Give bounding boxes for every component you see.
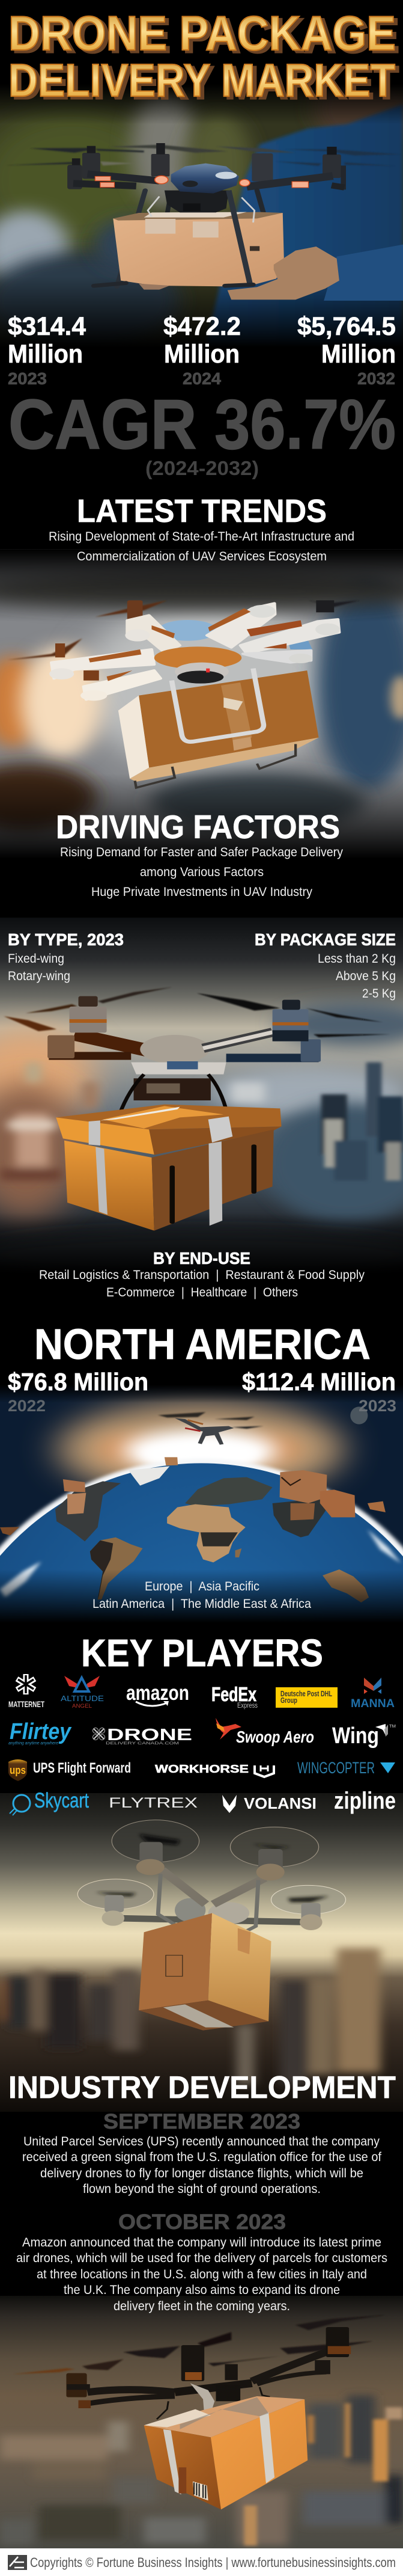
drone motors and arms (67, 143, 346, 189)
october development text: air drones, which will be used for the delivery of parcels for customers (16, 2251, 387, 2265)
blurred city (0, 2395, 403, 2545)
hero image: drone with package and courier (0, 88, 403, 343)
logo: manna (351, 1678, 395, 1710)
logo: volansi: VOLANSI (244, 1794, 317, 1812)
market size stat 2023: 2023 (8, 369, 47, 388)
footer logo (8, 2555, 27, 2570)
by package size segment: 2-5 Kg (362, 987, 396, 1001)
hanging package (139, 1913, 271, 2031)
logo: altitude angel (61, 1676, 104, 1709)
drone arms and motors (66, 2327, 351, 2419)
continent: asia (273, 1497, 334, 1538)
market size stat 2024: Million (164, 340, 240, 369)
logo: wing: TM (389, 1725, 396, 1729)
courier hand and sleeve (139, 245, 403, 301)
continent: madagascar (235, 1548, 241, 1557)
continent: australia (323, 1569, 369, 1602)
globe image: drone over earth with parcels (0, 1387, 403, 1620)
logo: drone delivery canada (92, 1725, 192, 1746)
latest trends text: Commercialization of UAV Services Ecosystem (77, 550, 327, 563)
cloud streaks (0, 1529, 401, 1598)
logo: deutsche post dhl: Group (280, 1696, 297, 1705)
driving factors text: among Various Factors (140, 865, 264, 879)
regional stat 2023: 2023 (359, 1397, 396, 1415)
by type segment: BY TYPE, 2023 (8, 930, 124, 949)
regional stat 2023 (242, 1368, 396, 1415)
driving factors text (60, 845, 343, 899)
logo: skycart (10, 1789, 89, 1815)
by package size segment: Above 5 Kg (336, 969, 396, 983)
driving factors text: Rising Demand for Faster and Safer Package Delivery (60, 845, 343, 859)
orange package (56, 1105, 282, 1231)
logo: swoop aero (216, 1718, 314, 1746)
market size stat 2024: 2024 (183, 369, 221, 388)
heading: north america: NORTH AMERICA (34, 1321, 371, 1369)
drone frame and motors (102, 1842, 323, 1934)
package with handle (118, 669, 319, 788)
market size stat 2023: Million (8, 340, 83, 369)
drone propellers (4, 987, 390, 1037)
logo: drone delivery canada: DELIVERY CANADA.COM (106, 1742, 179, 1746)
drone lights (95, 176, 309, 188)
small drone (158, 1412, 264, 1445)
regional stat 2022 (8, 1368, 148, 1415)
regional stat 2023: $112.4 Million (242, 1368, 396, 1396)
heading: driving factors: DRIVING FACTORS (56, 808, 340, 845)
logo: ups flight forward (8, 1759, 131, 1781)
logo: flirtey: Flirtey (10, 1719, 72, 1744)
CAGR period: (2024-2032) (145, 457, 259, 479)
logo: fedex express: FedEx (211, 1683, 256, 1705)
other regions list: Europe | Asia Pacific (145, 1580, 259, 1593)
continent: europe (185, 1477, 273, 1506)
logo: swoop aero: Swoop Aero (236, 1728, 314, 1746)
logo: flirtey: anything anytime anywhere (8, 1741, 58, 1746)
latest trends text: Rising Development of State-of-The-Art Infrastructure and (49, 530, 354, 544)
logo: workhorse: WORKHORSE (155, 1763, 249, 1775)
continent: greenland (129, 1466, 169, 1486)
continent: africa (167, 1504, 246, 1562)
logo: drone delivery canada: DRONE (107, 1725, 192, 1744)
latest trends text (49, 530, 354, 563)
title (8, 7, 399, 109)
parcels on globe (0, 1457, 386, 1535)
by package size segment (255, 930, 396, 1001)
logo: matternet (8, 1674, 44, 1709)
logo: manna: MANNA (351, 1697, 395, 1710)
logo: skycart: Skycart (34, 1789, 89, 1812)
october development text: the U.K. The company also aims to expand its drone (64, 2283, 340, 2297)
small moon (350, 1406, 368, 1424)
market size stat 2032: Million (321, 340, 396, 369)
drone body (94, 164, 255, 287)
october development text: delivery fleet in the coming years. (114, 2299, 290, 2313)
market size stat 2023: $314.4 (8, 312, 86, 341)
by type segment: Fixed-wing (8, 952, 64, 966)
by end-use segment: E-Commerce | Healthcare | Others (106, 1286, 298, 1299)
market size stat 2024 (163, 312, 241, 388)
cardboard package (113, 212, 284, 287)
other regions list: Latin America | The Middle East & Africa (92, 1597, 311, 1611)
continent: north america (55, 1481, 121, 1541)
logo: altitude angel: ALTITUDE (61, 1694, 104, 1703)
logo: flytrex: FLYTREX (109, 1795, 198, 1811)
october development text: at three locations in the U.S. along with a few cities in Italy and (37, 2268, 367, 2281)
orange parcel (144, 2396, 308, 2509)
september development text: delivery drones to fly for longer distance flights, which will be (40, 2167, 363, 2180)
september development text (22, 2135, 381, 2196)
drone frame (47, 996, 321, 1114)
by end-use segment (39, 1249, 365, 1299)
drone white frame (49, 600, 340, 701)
september development text: flown beyond the sight of ground operations. (83, 2182, 321, 2196)
logo: altitude angel: ANGEL (72, 1703, 92, 1709)
regional stat 2022: 2022 (8, 1397, 46, 1415)
by end-use segment: Retail Logistics & Transportation | Restaurant & Food Supply (39, 1268, 365, 1282)
industry development image: drone with rotor discs (0, 1793, 403, 2112)
market size stat 2023 (8, 312, 86, 388)
september development text: United Parcel Services (UPS) recently announced that the company (23, 2135, 380, 2148)
logo: amazon: amazon (126, 1681, 189, 1705)
logo: deutsche post dhl: Deutsche Post DHL (280, 1689, 332, 1698)
by type segment: Rotary-wing (8, 969, 70, 983)
segmentation image: drone over city (0, 918, 403, 1263)
blurred city buildings (321, 1063, 403, 1180)
drone propellers (8, 600, 360, 660)
logo: ups flight forward: ups (10, 1764, 26, 1776)
drone legs (117, 191, 277, 287)
heading: latest trends: LATEST TRENDS (77, 493, 327, 529)
logo: wing: Wing (332, 1723, 379, 1749)
by type segment (8, 930, 124, 983)
by package size segment: BY PACKAGE SIZE (255, 930, 396, 949)
blurred skyline (0, 1948, 380, 2085)
by package size segment: Less than 2 Kg (318, 952, 396, 966)
logo: matternet: MATTERNET (8, 1699, 44, 1709)
heading: september 2023: SEPTEMBER 2023 (103, 2110, 300, 2133)
logo: ups flight forward: UPS Flight Forward (33, 1760, 131, 1776)
logo: fedex express: Express (237, 1701, 258, 1710)
rotor discs (77, 1820, 346, 1914)
market size stat 2032 (297, 312, 396, 388)
heading: october 2023: OCTOBER 2023 (118, 2210, 286, 2234)
by end-use segment: BY END-USE (153, 1249, 250, 1268)
october development text (16, 2236, 387, 2313)
market size stat 2032: 2032 (357, 369, 395, 388)
continent: south america (90, 1538, 143, 1599)
other regions list (92, 1580, 311, 1611)
logo: fedex express (211, 1683, 258, 1710)
final image: drone with orange parcel over city (0, 2296, 403, 2548)
heading: key players: KEY PLAYERS (81, 1631, 323, 1675)
globe (0, 1459, 403, 2005)
logo: deutsche post dhl (276, 1687, 338, 1708)
logo: workhorse (155, 1763, 274, 1777)
drone propellers (13, 2315, 386, 2374)
latest trends image: white drone with box (0, 549, 403, 854)
footer (0, 2548, 403, 2576)
october development text: Amazon announced that the company will introduce its latest prime (22, 2236, 381, 2249)
heading: industry development: INDUSTRY DEVELOPMENT (8, 2070, 396, 2105)
market size stat 2024: $472.2 (163, 312, 241, 341)
september development text: received a green signal from the U.S. regulation office for the use of (22, 2150, 381, 2164)
market size stat 2032: $5,764.5 (297, 312, 396, 341)
driving factors text: Huge Private Investments in UAV Industry (91, 885, 312, 899)
drone propellers (5, 145, 401, 166)
regional stat 2022: $76.8 Million (8, 1368, 148, 1396)
